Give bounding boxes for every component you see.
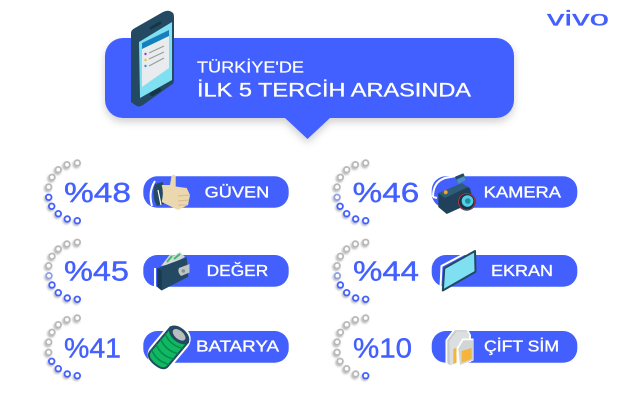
icon: thumbs up [151, 175, 190, 210]
title line 2: İLK 5 TERCİH ARASINDA [197, 80, 471, 102]
progress dots [334, 160, 369, 224]
value: %10 [353, 332, 412, 363]
value: %41 [64, 332, 121, 363]
value: %45 [64, 256, 129, 287]
progress dots [334, 240, 369, 302]
item: batarya [46, 315, 289, 379]
label: BATARYA [196, 339, 280, 356]
label: EKRAN [491, 263, 553, 280]
pill [432, 176, 577, 208]
value: %46 [353, 177, 419, 208]
label: KAMERA [484, 185, 562, 202]
item: kamera [334, 160, 577, 224]
progress dots [46, 160, 80, 224]
icon: phone [131, 11, 174, 106]
pill [432, 331, 577, 363]
label: ÇİFT SİM [484, 338, 559, 356]
pill [143, 255, 289, 287]
label: GÜVEN [205, 184, 269, 202]
label: DEĞER [207, 263, 268, 280]
item: değer [46, 240, 289, 302]
pill [432, 255, 577, 287]
icon: sim cards [446, 328, 474, 368]
title line 1: TÜRKİYE'DE [197, 58, 304, 76]
value: %48 [64, 177, 131, 208]
icon: battery [142, 319, 196, 375]
progress dots [46, 240, 80, 302]
logo: vivo: vivo [547, 8, 609, 30]
value: %44 [353, 256, 419, 287]
progress dots [46, 315, 80, 379]
icon: tablet [440, 250, 476, 290]
item: çift sim [334, 315, 577, 379]
icon: wallet [155, 252, 190, 292]
title banner [105, 38, 514, 139]
item: güven [46, 160, 289, 224]
icon: camera [433, 173, 476, 214]
pill [143, 176, 289, 208]
item: ekran [334, 240, 577, 302]
pill [143, 331, 289, 363]
progress dots [334, 315, 369, 379]
